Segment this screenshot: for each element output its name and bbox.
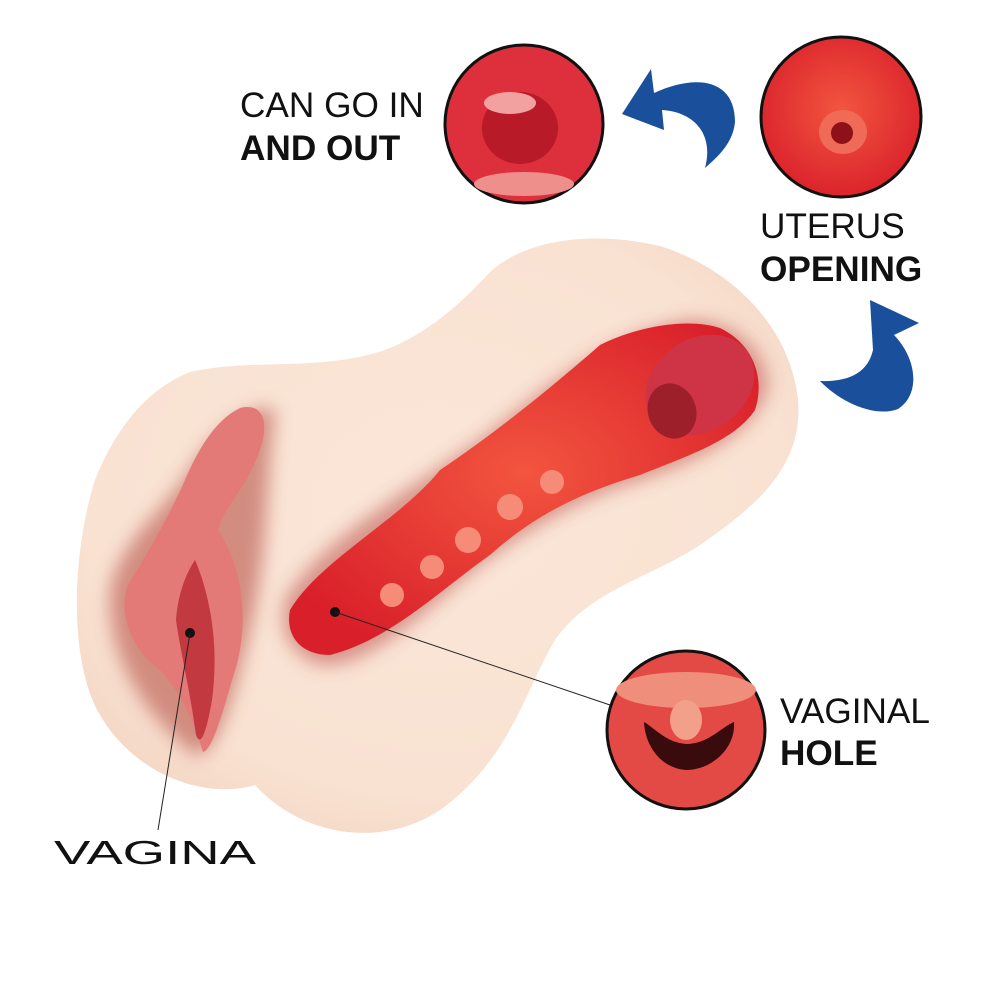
leader line: vaginal hole xyxy=(330,607,610,705)
product body xyxy=(77,239,798,833)
heading: vaginal hole: VAGINAL xyxy=(780,692,930,731)
leader line: vagina xyxy=(158,628,195,830)
heading: vaginal hole xyxy=(780,692,930,773)
heading: uterus opening xyxy=(760,207,922,289)
heading: can go in and out: CAN GO IN xyxy=(240,86,424,125)
heading: can go in and out xyxy=(240,86,424,168)
arrow: from uterus opening to inner view xyxy=(622,69,735,168)
callout circle: uterus opening xyxy=(761,37,921,197)
inner channel xyxy=(283,314,774,665)
heading: vagina: VAGINA xyxy=(54,834,256,871)
arrow: from product to uterus opening xyxy=(820,300,919,412)
callout circle: vaginal hole xyxy=(607,651,765,809)
heading: can go in and out: AND OUT xyxy=(240,129,401,168)
heading: vaginal hole: HOLE xyxy=(780,734,878,773)
heading: uterus opening: OPENING xyxy=(760,250,922,289)
heading: uterus opening: UTERUS xyxy=(760,207,905,246)
left opening area xyxy=(110,407,275,755)
callout circle: can go in and out xyxy=(445,45,603,203)
